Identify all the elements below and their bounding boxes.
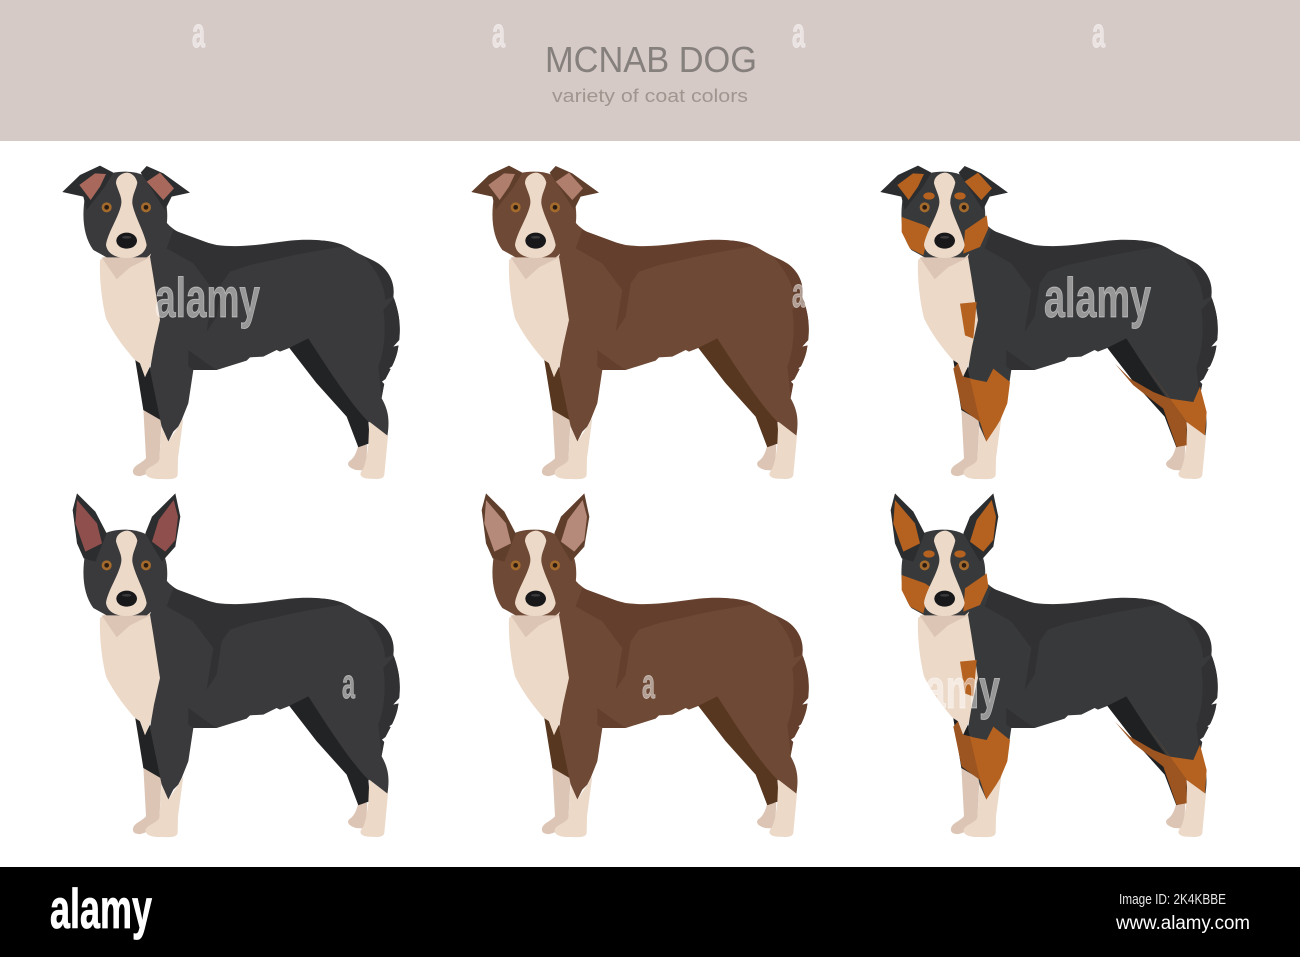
dog: brown and white folded ears: [471, 166, 809, 479]
subtitle: variety of coat colors: [552, 85, 748, 106]
dog: black and white erect ears: [73, 493, 400, 837]
dog: brown and white erect ears: [482, 493, 809, 837]
watermarks: alamy: [155, 266, 260, 329]
footer logo: alamy: [50, 877, 152, 940]
title: MCNAB DOG: [545, 39, 757, 80]
watermarks: a: [1092, 9, 1105, 56]
watermarks: a: [492, 9, 505, 56]
dog: black and white folded ears: [62, 166, 400, 479]
website: www.alamy.com: [1115, 913, 1250, 934]
dog: tricolor erect ears: [891, 493, 1218, 837]
footer bar: [0, 867, 1300, 957]
dog: tricolor folded ears: [880, 166, 1218, 479]
watermarks: a: [792, 9, 805, 56]
watermarks: a: [792, 269, 805, 316]
watermarks: alamy: [1044, 266, 1151, 329]
image id: Image ID: 2K4KBBE: [1119, 891, 1226, 908]
watermarks: [155, 9, 1151, 720]
watermarks: a: [342, 660, 355, 707]
watermarks: a: [642, 660, 655, 707]
header band: [0, 0, 1300, 141]
watermarks: alamy: [893, 657, 1000, 720]
watermarks: a: [192, 9, 205, 56]
